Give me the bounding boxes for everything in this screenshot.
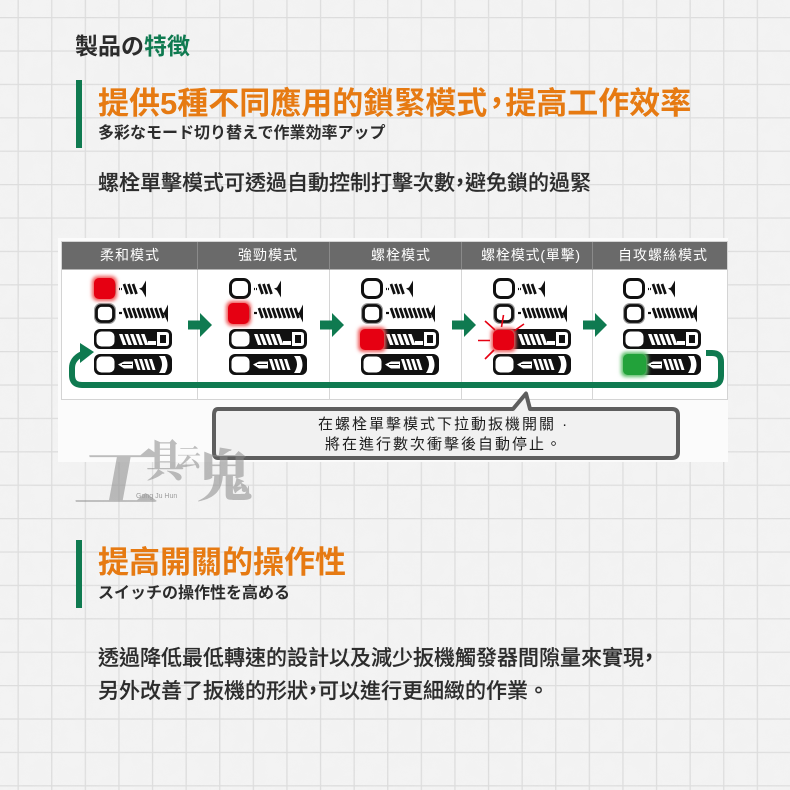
body text: section two: 另外改善了扳機的形狀，可以進行更細緻的作業。 — [98, 674, 549, 704]
callout: single-hit explanation — [214, 394, 678, 458]
column 5: self-tapping screw mode — [621, 280, 701, 377]
watermark logo — [70, 425, 252, 520]
subheading: section one: 多彩なモード切り替えで作業効率アップ — [98, 125, 386, 142]
body text: section two — [98, 642, 654, 704]
arrow: single-hit to self-tapping — [583, 313, 607, 337]
section label: 製品の特徴: 製品の特徴 — [75, 33, 190, 59]
column 1: soft mode — [92, 276, 172, 375]
callout: single-hit explanation: 在螺栓單擊模式下拉動扳機開關 · — [318, 415, 569, 433]
watermark logo: Gong Ju Hun — [136, 493, 177, 500]
header row: 螺栓模式 — [371, 247, 431, 263]
watermark logo: 工 — [70, 425, 173, 520]
heading: switch operability: 提高開關的操作性 — [98, 545, 346, 580]
column 4: bolt single-hit mode — [478, 280, 571, 375]
loop arrow: back to first mode — [72, 343, 721, 385]
header row: 柔和模式 — [100, 247, 160, 263]
arrow: soft to strong — [188, 313, 212, 337]
heading: five locking modes: 提供5種不同應用的鎖緊模式，提高工作效率 — [98, 78, 691, 123]
header row — [62, 242, 727, 270]
body text: section one: 螺栓單擊模式可透過自動控制打擊次數，避免鎖的過緊 — [98, 167, 591, 197]
callout: single-hit explanation: 將在進行數次衝擊後自動停止。 — [325, 435, 563, 453]
body text: section two: 透過降低最低轉速的設計以及減少扳機觸發器間隙量來實現， — [98, 642, 654, 672]
watermark logo: 云 — [177, 438, 201, 473]
white image backdrop — [58, 238, 728, 462]
subheading: section two: スイッチの操作性を高める — [98, 585, 290, 602]
header row: 自攻螺絲模式 — [618, 247, 708, 263]
header row: 螺栓模式(單擊) — [481, 247, 581, 263]
header row: 強勁模式 — [238, 247, 298, 263]
accent bar: section two — [76, 540, 82, 608]
column 2: strong mode — [226, 280, 307, 375]
column 3: bolt mode — [358, 280, 439, 375]
panel frame — [62, 242, 728, 400]
arrow: bolt to single-hit — [452, 313, 476, 337]
arrow: strong to bolt — [320, 313, 344, 337]
watermark logo: 具 — [146, 425, 184, 489]
watermark logo: 鬼 — [196, 433, 252, 513]
accent bar: section one — [76, 80, 82, 148]
column dividers — [198, 269, 592, 400]
